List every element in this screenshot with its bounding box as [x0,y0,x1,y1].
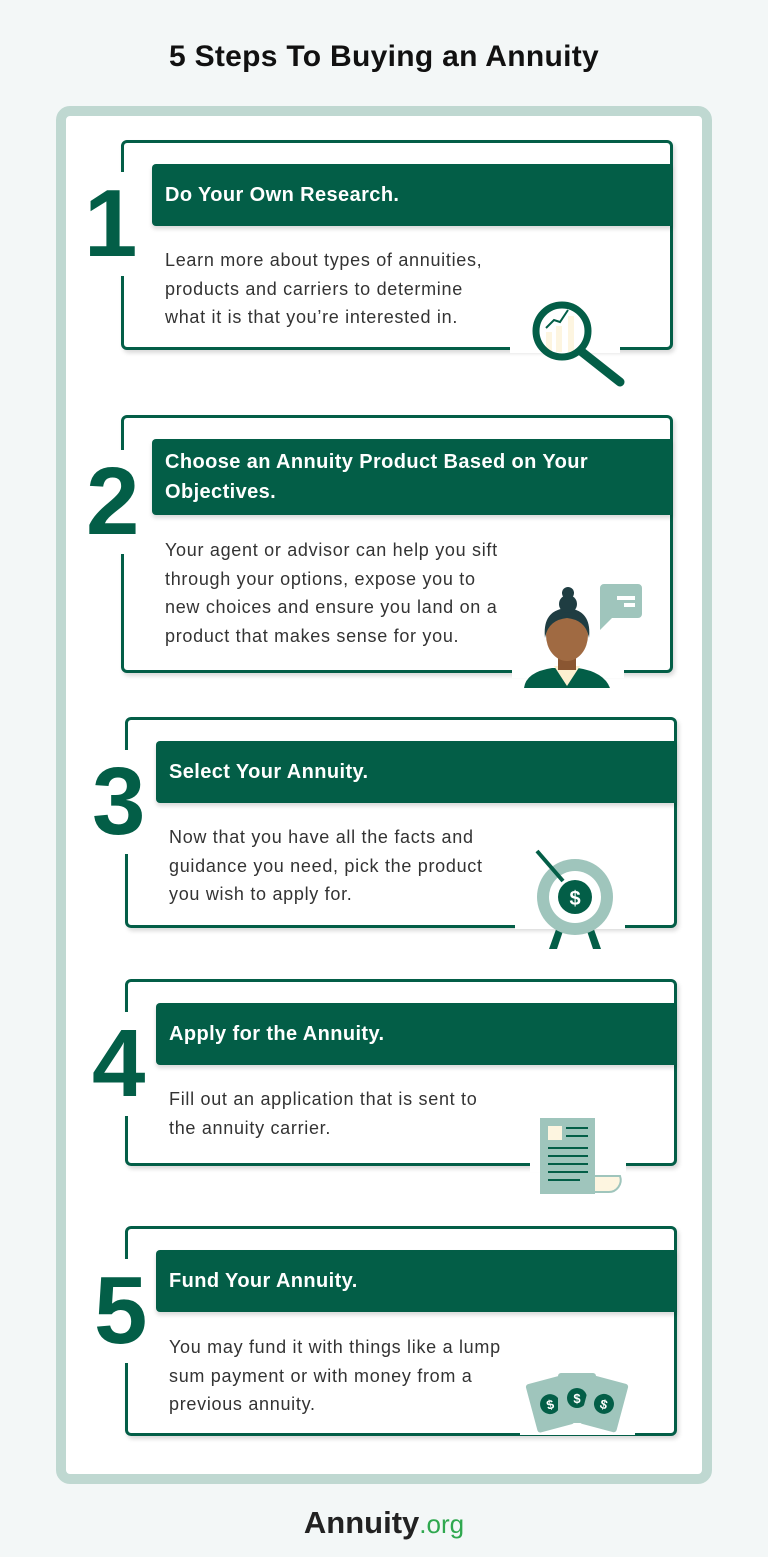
header 4: Apply for the Annuity. [169,1023,384,1045]
icon: money: $ [545,1396,556,1413]
text 2: new choices and ensure you land on a [165,597,497,617]
frame [56,106,712,1484]
header 3 [156,741,676,803]
number 2: 2 [86,448,139,555]
text 2: Your agent or advisor can help you sift [165,540,498,560]
header 1 [152,164,672,226]
number 5: 5 [94,1257,147,1364]
header 2: Choose an Annuity Product Based on Your [165,451,588,473]
header 2 [152,439,672,515]
text 2: product that makes sense for you. [165,626,459,646]
number 3: 3 [92,748,145,855]
header 1: Do Your Own Research. [165,184,399,206]
text 4 [169,1089,477,1138]
icon: target: $ [569,888,581,910]
number 4: 4 [92,1010,145,1117]
title: 5 Steps To Buying an Annuity [169,40,599,73]
text 1 [165,250,482,327]
header 5 [156,1250,676,1312]
text 1: what it is that you’re interested in. [165,307,458,327]
header 5: Fund Your Annuity. [169,1270,358,1292]
icon: money: $ [598,1396,610,1413]
header 2: Objectives. [165,481,276,503]
text 4: Fill out an application that is sent to [169,1089,477,1109]
card 1 [121,140,673,350]
icon: target [515,850,625,949]
number 1: 1 [84,170,137,277]
card 3 [125,717,677,928]
text 5 [169,1337,501,1414]
icon: advisor [512,584,642,688]
card 2 [121,415,673,673]
text 5: sum payment or with money from a [169,1366,473,1386]
logo: Annuity.org [304,1505,464,1540]
text 1: products and carriers to determine [165,278,463,298]
text 3 [169,827,483,904]
text 2: through your options, expose you to [165,568,476,588]
text 3: guidance you need, pick the product [169,856,483,876]
header 3: Select Your Annuity. [169,761,369,783]
header 4 [156,1003,676,1065]
icon: money [520,1373,635,1435]
text 1: Learn more about types of annuities, [165,250,482,270]
text 2 [165,540,498,646]
text 4: the annuity carrier. [169,1118,331,1138]
icon: money: $ [573,1391,581,1406]
text 3: Now that you have all the facts and [169,827,474,847]
icon: document [530,1118,626,1194]
card 5 [125,1226,677,1436]
text 5: previous annuity. [169,1394,316,1414]
text 5: You may fund it with things like a lump [169,1337,501,1357]
text 3: you wish to apply for. [169,884,352,904]
card 4 [125,979,677,1166]
icon: magnifier [510,302,624,386]
